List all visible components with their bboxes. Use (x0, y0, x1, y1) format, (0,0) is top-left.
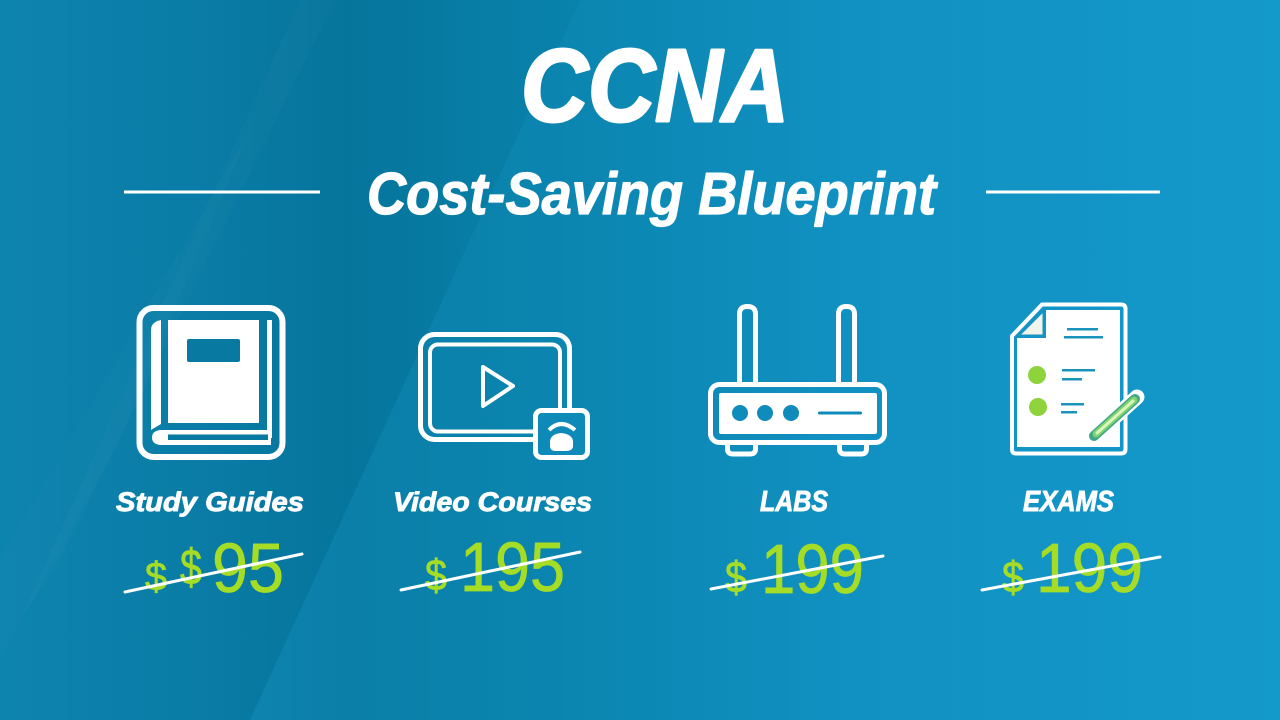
item: video courses (393, 334, 592, 606)
price: video courses: 195 (460, 528, 565, 606)
price: study guides (125, 529, 302, 607)
item: labs (710, 306, 884, 608)
price: exams: $ (1002, 553, 1024, 602)
item: exams (982, 304, 1160, 607)
price: study guides: $ (180, 539, 202, 595)
icon: pencil (1094, 397, 1137, 436)
icon: router (710, 306, 884, 454)
icon: video player (420, 334, 588, 458)
icon: exam sheet (1012, 304, 1137, 454)
subtitle: Cost-Saving Blueprint (367, 161, 938, 227)
price: exams: 199 (1036, 529, 1143, 607)
title: CCNA (521, 28, 789, 143)
label: exams: EXAMS (1023, 486, 1115, 518)
icon: book (140, 308, 282, 457)
price: video courses (401, 528, 580, 606)
label: study guides: Study Guides (116, 487, 304, 517)
item: study guides (116, 308, 304, 607)
price: video courses: $ (425, 551, 447, 600)
price: labs: 199 (761, 530, 864, 608)
label: video courses: Video Courses (393, 487, 592, 517)
label: labs: LABS (760, 486, 829, 518)
price: labs (711, 530, 883, 608)
price: exams (982, 529, 1160, 607)
price: study guides: $ (145, 555, 167, 599)
price: labs: $ (725, 553, 747, 602)
price: study guides: 95 (212, 529, 284, 607)
